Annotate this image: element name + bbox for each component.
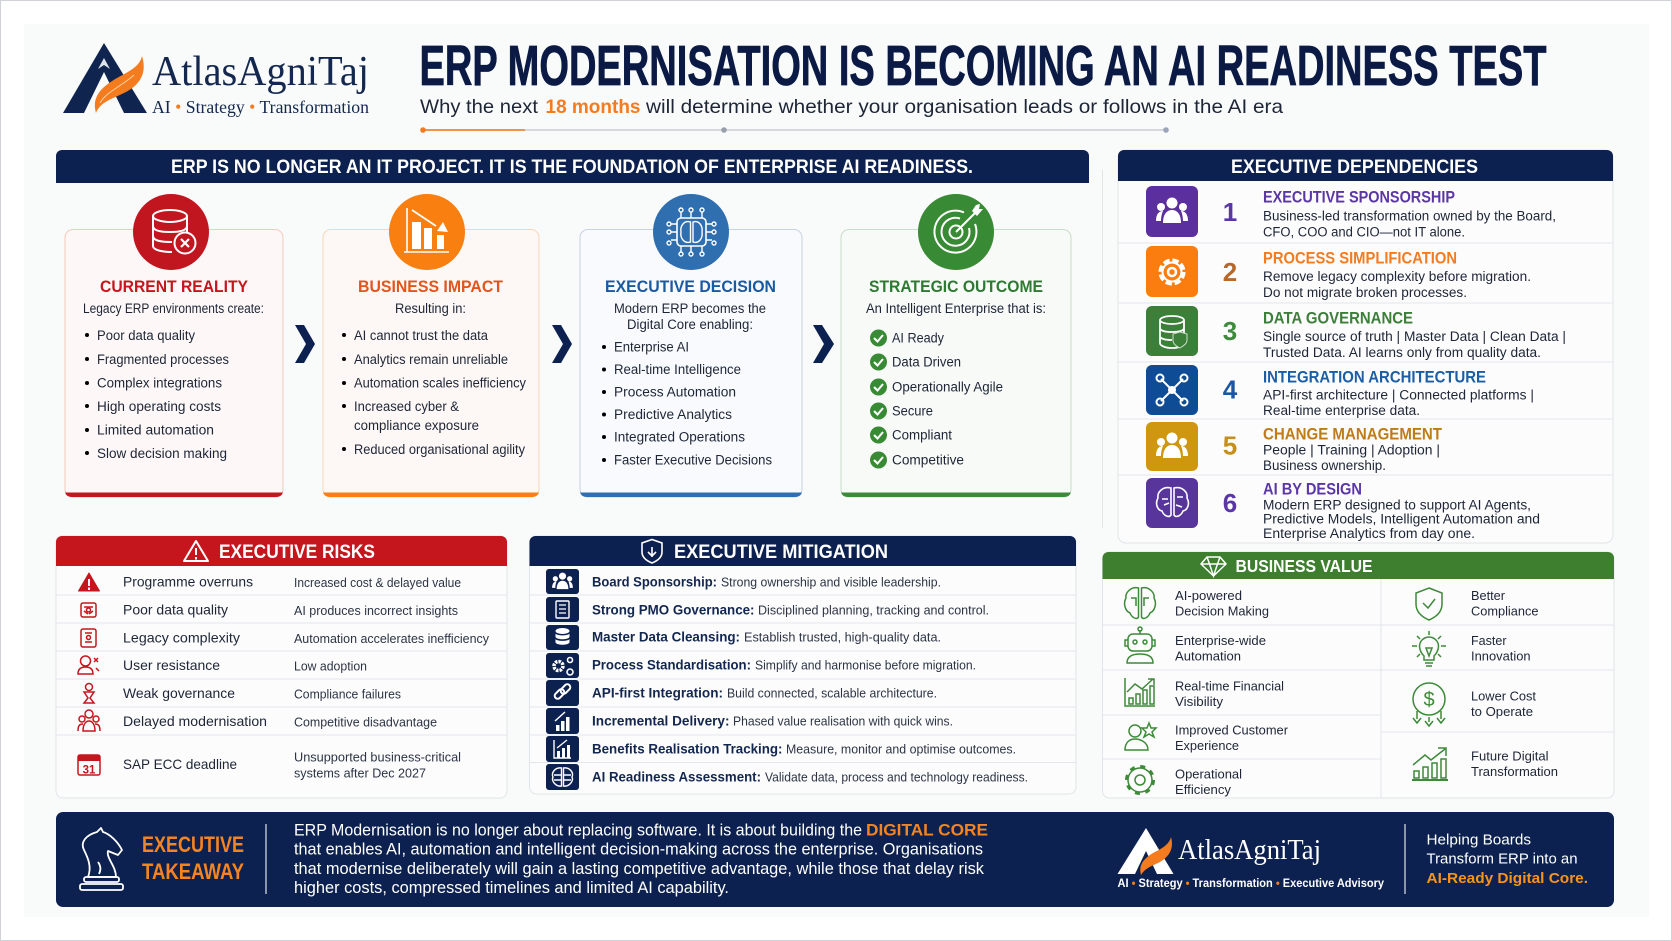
subtitle <box>420 96 1283 118</box>
checklist: Operationally Agile <box>892 380 1003 394</box>
dependency 6: 6 <box>1223 488 1237 518</box>
bullet list: Integrated Operations <box>614 430 745 444</box>
takeaway text: DIGITAL CORE <box>866 820 988 840</box>
bullet list: AI cannot trust the data <box>354 328 488 343</box>
mitigation 4: Simplify and harmonise before migration. <box>755 658 976 672</box>
mitigation 7: Measure, monitor and optimise outcomes. <box>786 742 1016 756</box>
icon: diamond <box>1201 557 1226 576</box>
mitigation 4: Process Standardisation: <box>592 658 751 672</box>
mitigation 5: Build connected, scalable architecture. <box>727 686 937 700</box>
risk 2: Poor data quality <box>123 602 228 618</box>
value: better compliance <box>1416 588 1538 620</box>
mitigation 8 <box>546 764 1028 790</box>
mitigation 7: Benefits Realisation Tracking: <box>592 742 782 756</box>
value: faster innovation: Innovation <box>1471 648 1531 664</box>
logo: footer <box>1118 828 1384 890</box>
value: improved customer experience: Improved Customer <box>1175 722 1289 738</box>
value: real-time financial visibility <box>1125 678 1284 709</box>
dependency 1: CFO, COO and CIO—not IT alone. <box>1263 224 1465 240</box>
bullet list: Analytics remain unreliable <box>354 352 508 367</box>
risk 6 <box>78 710 437 731</box>
icon: database error <box>133 194 209 270</box>
subtitle: 18 months <box>546 96 641 118</box>
subtitle: will determine whether your organisation leads or follows in the AI era <box>645 96 1283 118</box>
dependency 3: Trusted Data. AI learns only from quality data. <box>1263 345 1541 360</box>
checklist: Data Driven <box>892 354 961 370</box>
dependency 1: EXECUTIVE SPONSORSHIP <box>1263 188 1455 206</box>
icon: warning <box>184 541 208 561</box>
value: improved customer experience: Experience <box>1175 738 1239 753</box>
bullet list: Process Automation <box>614 384 736 400</box>
value: lower cost to operate: to Operate <box>1471 704 1533 719</box>
icon: target <box>918 194 994 270</box>
heading: CURRENT REALITY <box>100 278 248 296</box>
value: better compliance: Better <box>1471 588 1506 603</box>
risk 5 <box>84 684 401 703</box>
takeaway text <box>294 820 988 897</box>
value: lower cost to operate: Lower Cost <box>1471 688 1536 704</box>
risk 4: User resistance <box>123 657 220 673</box>
risk 4 <box>78 656 367 674</box>
dependency 6: Predictive Models, Intelligent Automation and <box>1263 512 1540 526</box>
dependency 3 <box>1146 306 1566 360</box>
value: enterprise-wide automation: Enterprise-wide <box>1175 633 1266 648</box>
mitigation 6: Incremental Delivery: <box>592 714 730 728</box>
value: faster innovation: Faster <box>1471 633 1507 648</box>
takeaway text: higher costs, compressed timelines and limited AI capability. <box>294 879 729 897</box>
logo: footer: AtlasAgniTaj <box>1178 834 1321 866</box>
closing message <box>1426 832 1588 887</box>
mitigation 8: AI Readiness Assessment: <box>592 770 761 784</box>
dependency 5: Business ownership. <box>1263 458 1386 473</box>
dependency 6: AI BY DESIGN <box>1263 480 1362 498</box>
dependency 3: Single source of truth | Master Data | Clean Data | <box>1263 329 1566 344</box>
intro text: An Intelligent Enterprise that is: <box>866 301 1046 316</box>
panel: strategic outcome <box>841 194 1071 497</box>
checklist: AI Ready <box>892 330 944 346</box>
bullet list: Limited automation <box>97 422 214 438</box>
dependency 6: Modern ERP designed to support AI Agents, <box>1263 498 1531 512</box>
mitigation 1 <box>546 569 941 594</box>
logo: footer: AI • Strategy • Transformation • Executive Advisory <box>1118 876 1384 890</box>
risk 7 <box>78 750 461 780</box>
closing message: Helping Boards <box>1426 832 1531 848</box>
value: lower cost to operate <box>1413 683 1536 726</box>
risk 6: Delayed modernisation <box>123 713 267 729</box>
value: enterprise-wide automation: Automation <box>1175 648 1241 664</box>
subtitle: Why the next <box>420 96 539 118</box>
bullet list <box>85 328 229 461</box>
mitigation 1: Board Sponsorship: <box>592 574 717 590</box>
dependency 1: 1 <box>1223 197 1237 227</box>
panel: business impact <box>323 194 539 497</box>
intro text: Digital Core enabling: <box>627 317 753 332</box>
mitigation 3: Master Data Cleansing: <box>592 630 740 644</box>
heading: STRATEGIC OUTCOME <box>869 278 1043 296</box>
value: real-time financial visibility: Real-time Financial <box>1175 678 1284 694</box>
intro text: Legacy ERP environments create: <box>83 301 264 316</box>
logo: AtlasAgniTaj header <box>63 43 369 117</box>
dependency 2: Do not migrate broken processes. <box>1263 285 1467 300</box>
takeaway text: that modernise deliberately will gain a lasting competitive advantage, while those that delay risk <box>294 860 985 878</box>
intro text: Resulting in: <box>395 301 466 316</box>
dependency 5 <box>1146 422 1442 473</box>
panel: executive decision <box>580 194 802 497</box>
dependency 4: 4 <box>1223 374 1238 404</box>
takeaway text: ERP Modernisation is no longer about replacing software. It is about building the <box>294 822 862 840</box>
risk 3: Legacy complexity <box>123 630 240 646</box>
value: better compliance: Compliance <box>1471 604 1538 618</box>
value: future digital transformation <box>1412 748 1558 780</box>
bullet list: Predictive Analytics <box>614 407 732 422</box>
mitigation 1: Strong ownership and visible leadership. <box>721 576 941 590</box>
mitigation 7 <box>546 736 1016 762</box>
checklist: Competitive <box>892 452 964 468</box>
mitigation 8: Validate data, process and technology readiness. <box>765 770 1028 784</box>
dependency 4: API-first architecture | Connected platforms | <box>1263 388 1534 402</box>
value: operational efficiency: Efficiency <box>1175 782 1231 797</box>
risk 7: systems after Dec 2027 <box>294 766 426 780</box>
closing message: Transform ERP into an <box>1426 850 1578 868</box>
panel: executive mitigation <box>529 536 1076 794</box>
bullet list <box>602 340 772 468</box>
label: TAKEAWAY <box>142 859 244 884</box>
mitigation 2: Strong PMO Governance: <box>592 602 754 618</box>
bullet list: Enterprise AI <box>614 340 689 354</box>
value: faster innovation <box>1412 631 1531 666</box>
mitigation 3: Establish trusted, high-quality data. <box>744 630 941 644</box>
dependency 4 <box>1146 365 1534 418</box>
banner heading: ERP IS NO LONGER AN IT PROJECT. IT IS THE FOUNDATION OF ENTERPRISE AI READINESS. <box>171 157 973 178</box>
panel: executive risks <box>56 536 507 798</box>
dependency 5: People | Training | Adoption | <box>1263 442 1440 458</box>
panel: executive dependencies <box>1118 150 1613 543</box>
dependency 2: Remove legacy complexity before migration. <box>1263 269 1531 284</box>
heading: EXECUTIVE RISKS <box>219 542 375 563</box>
value: AI-powered decision making: AI-powered <box>1175 588 1242 603</box>
label <box>142 832 244 884</box>
dependency 6: Enterprise Analytics from day one. <box>1263 526 1475 541</box>
heading: EXECUTIVE MITIGATION <box>674 542 888 563</box>
risk 5: Weak governance <box>123 685 235 701</box>
dependency 2: PROCESS SIMPLIFICATION <box>1263 250 1457 268</box>
bullet list: Complex integrations <box>97 376 222 390</box>
value: operational efficiency: Operational <box>1175 766 1242 782</box>
logo: AtlasAgniTaj header: AI • Strategy • Transformation <box>152 97 369 117</box>
dependency 4: Real-time enterprise data. <box>1263 403 1420 418</box>
bullet list: Faster Executive Decisions <box>614 452 772 468</box>
mitigation 2: Disciplined planning, tracking and control. <box>758 604 989 618</box>
icon: AI chip brain <box>653 194 729 270</box>
dependency 2: 2 <box>1223 257 1237 287</box>
value: improved customer experience <box>1125 722 1289 753</box>
bullet list: Reduced organisational agility <box>354 442 525 457</box>
dependency 1: Business-led transformation owned by the Board, <box>1263 208 1556 224</box>
panel: business value <box>1102 552 1614 798</box>
risk 2 <box>81 602 458 618</box>
risk 4: Low adoption <box>294 660 367 674</box>
dependency 2 <box>1146 246 1531 300</box>
value: future digital transformation: Future Digital <box>1471 748 1549 764</box>
closing message: AI-Ready Digital Core. <box>1426 870 1588 887</box>
dependency 3: DATA GOVERNANCE <box>1263 310 1413 328</box>
bullet list: Real-time Intelligence <box>614 362 741 377</box>
logo: AtlasAgniTaj header: AtlasAgniTaj <box>152 49 369 95</box>
intro text: Modern ERP becomes the <box>614 301 766 316</box>
arrow <box>295 325 315 363</box>
icon: shield <box>642 540 662 563</box>
timeline rule <box>420 127 1169 133</box>
heading: BUSINESS VALUE <box>1236 556 1372 576</box>
label: EXECUTIVE <box>142 832 244 857</box>
dependency 6 <box>1146 478 1540 541</box>
panel: current reality <box>65 194 283 497</box>
dependency 1 <box>1146 186 1556 240</box>
bullet list: compliance exposure <box>354 418 479 433</box>
bullet list: Increased cyber & <box>354 399 459 414</box>
bullet list: Slow decision making <box>97 446 227 461</box>
checklist: Secure <box>892 404 933 418</box>
arrow <box>552 325 572 363</box>
checklist: Compliant <box>892 428 952 442</box>
risk 7: 31 <box>83 764 96 776</box>
mitigation 6: Phased value realisation with quick wins. <box>733 714 953 728</box>
value: AI-powered decision making <box>1125 588 1269 618</box>
risk 1 <box>78 573 461 591</box>
value: real-time financial visibility: Visibility <box>1175 694 1224 709</box>
mitigation 5: API-first Integration: <box>592 686 723 700</box>
heading: BUSINESS IMPACT <box>358 278 503 296</box>
risk 3: Automation accelerates inefficiency <box>294 632 490 646</box>
bullet list: Fragmented processes <box>97 352 229 367</box>
risk 1: Increased cost & delayed value <box>294 576 461 590</box>
arrow <box>813 325 834 363</box>
dependency 5: CHANGE MANAGEMENT <box>1263 426 1442 444</box>
heading: EXECUTIVE DECISION <box>605 278 776 296</box>
banner heading <box>56 150 1089 183</box>
mitigation 6 <box>546 708 953 734</box>
bullet list: High operating costs <box>97 399 221 414</box>
value: lower cost to operate: $ <box>1423 689 1435 711</box>
dependency 3: 3 <box>1223 316 1237 346</box>
mitigation 2 <box>546 597 989 622</box>
icon: declining chart <box>389 194 465 270</box>
panel: executive takeaway footer <box>56 812 1614 907</box>
bullet list <box>342 328 526 457</box>
mitigation 4 <box>546 653 976 678</box>
mitigation 5 <box>546 680 937 706</box>
bullet list: Automation scales inefficiency <box>354 376 526 390</box>
bullet list: Poor data quality <box>97 328 195 343</box>
value: future digital transformation: Transformation <box>1471 764 1558 779</box>
value: operational efficiency <box>1126 766 1242 797</box>
risk 3 <box>81 629 490 647</box>
dependency 4: INTEGRATION ARCHITECTURE <box>1263 368 1486 386</box>
takeaway text: that enables AI, automation and intelligent decision-making across the enterprise. Organisations <box>294 840 983 858</box>
risk 2: AI produces incorrect insights <box>294 604 458 618</box>
risk 7: Unsupported business-critical <box>294 750 461 764</box>
value: AI-powered decision making: Decision Making <box>1175 604 1269 618</box>
risk 5: Compliance failures <box>294 688 401 702</box>
heading: EXECUTIVE DEPENDENCIES <box>1231 157 1478 178</box>
risk 1: Programme overruns <box>123 574 253 590</box>
value: enterprise-wide automation <box>1125 627 1266 664</box>
dependency 5: 5 <box>1223 430 1237 460</box>
risk 7: SAP ECC deadline <box>123 756 237 772</box>
intro text <box>614 301 766 332</box>
icon: chess knight <box>80 828 123 890</box>
checklist <box>870 330 1003 468</box>
mitigation 3 <box>546 625 941 650</box>
risk 6: Competitive disadvantage <box>294 716 437 730</box>
